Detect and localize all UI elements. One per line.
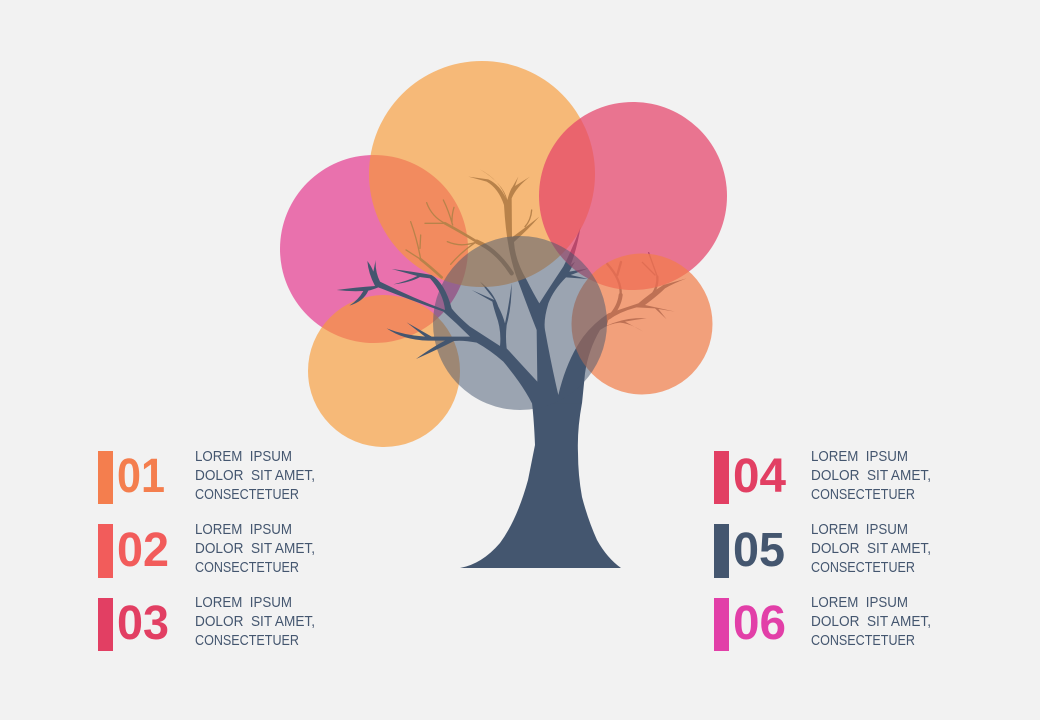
- text 03: CONSECTETUER: [195, 632, 299, 649]
- number 06: 06: [733, 597, 786, 650]
- text 03: [195, 594, 315, 649]
- bar 03: [98, 598, 113, 651]
- bar 02: [98, 524, 113, 578]
- bar 01: [98, 451, 113, 504]
- number 03: 03: [117, 597, 169, 650]
- text 06: [811, 594, 931, 649]
- text 01: [195, 448, 315, 503]
- circle: top orange: [369, 61, 595, 287]
- number 04: 04: [733, 450, 786, 503]
- number 05: 05: [733, 524, 785, 577]
- number 01: 01: [117, 450, 165, 503]
- text 01: LOREM IPSUM: [195, 448, 292, 465]
- text 02: LOREM IPSUM: [195, 521, 292, 538]
- text 01: CONSECTETUER: [195, 486, 299, 503]
- text 04: CONSECTETUER: [811, 486, 915, 503]
- circle: right pink: [539, 102, 727, 290]
- legend item 01: [98, 448, 315, 504]
- legend item 03: [98, 594, 315, 651]
- circle: lower orange: [308, 295, 460, 447]
- circle: left pink: [280, 155, 468, 343]
- tree silhouette: [337, 169, 687, 568]
- text 04: [811, 448, 931, 503]
- bar 04: [714, 451, 729, 504]
- text 02: CONSECTETUER: [195, 559, 299, 576]
- tree with overlapping circles: [280, 61, 727, 568]
- legend item 02: [98, 521, 315, 578]
- text 02: [195, 521, 315, 576]
- text 04: LOREM IPSUM: [811, 448, 908, 465]
- text 05: LOREM IPSUM: [811, 521, 908, 538]
- number 02: 02: [117, 524, 169, 577]
- text 06: DOLOR SIT AMET,: [811, 613, 931, 630]
- text 05: DOLOR SIT AMET,: [811, 540, 931, 557]
- bar 06: [714, 598, 729, 651]
- text 04: DOLOR SIT AMET,: [811, 467, 931, 484]
- text 05: CONSECTETUER: [811, 559, 915, 576]
- text 01: DOLOR SIT AMET,: [195, 467, 315, 484]
- text 03: DOLOR SIT AMET,: [195, 613, 315, 630]
- text 05: [811, 521, 931, 576]
- legend item 06: [714, 594, 931, 651]
- text 02: DOLOR SIT AMET,: [195, 540, 315, 557]
- legend item 04: [714, 448, 931, 504]
- bar 05: [714, 524, 729, 578]
- text 03: LOREM IPSUM: [195, 594, 292, 611]
- text 06: LOREM IPSUM: [811, 594, 908, 611]
- circle: centre grey: [433, 236, 607, 410]
- text 06: CONSECTETUER: [811, 632, 915, 649]
- legend item 05: [714, 521, 931, 578]
- circle: right salmon: [572, 254, 712, 394]
